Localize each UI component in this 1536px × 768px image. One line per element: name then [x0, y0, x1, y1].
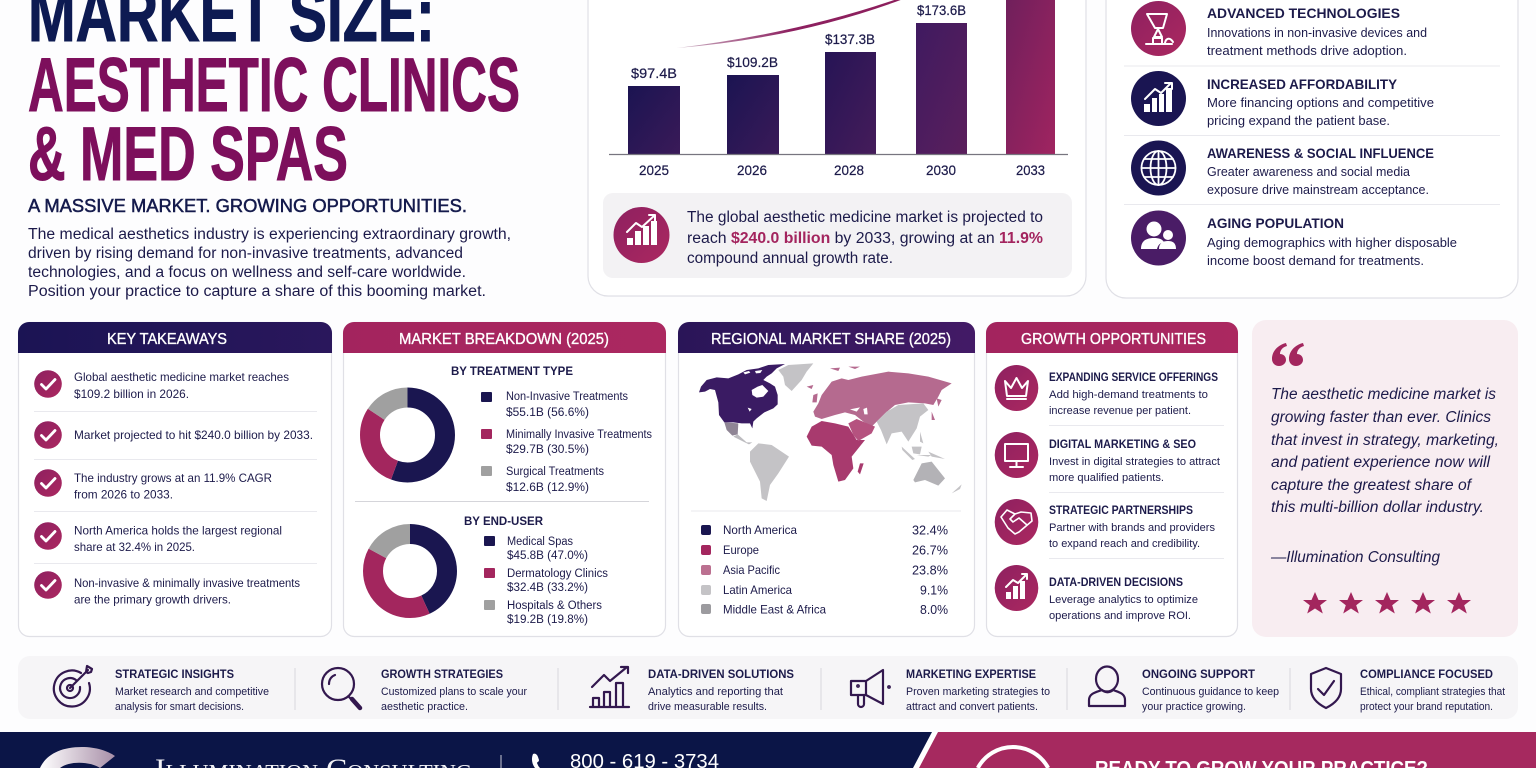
footer: [0, 732, 1536, 768]
opportunity: data-driven decisions: Leverage analytics to optimize: [1049, 594, 1198, 606]
opportunity: expanding service offerings: [995, 365, 1218, 417]
legend: end-user: $32.4B (33.2%): [507, 582, 588, 594]
opportunity: digital marketing and seo: more qualified patients.: [1049, 472, 1164, 484]
driver: aging population: AGING POPULATION: [1207, 215, 1344, 231]
takeaway 2: [34, 421, 313, 449]
service: compliance focused: COMPLIANCE FOCUSED: [1360, 669, 1493, 681]
intro paragraph: [28, 226, 511, 300]
opportunity: strategic partnerships: [995, 499, 1215, 550]
donut chart: end-user: [373, 534, 447, 608]
heading: market breakdown: MARKET BREAKDOWN (2025): [399, 331, 609, 348]
opportunity: digital marketing and seo: Invest in digital strategies to attract: [1049, 456, 1221, 468]
icon: phone: [532, 754, 540, 768]
panel: growth drivers: [1106, 0, 1518, 298]
bar chart: 2033: [1016, 163, 1045, 178]
service: strategic insights: analysis for smart decisions.: [115, 701, 244, 713]
heading: regional market share: [678, 322, 975, 353]
opportunity: strategic partnerships: Partner with brands and providers: [1049, 522, 1215, 534]
intro paragraph: Position your practice to capture a share of this booming market.: [28, 283, 486, 300]
service: marketing expertise: [851, 669, 1050, 713]
world map: [699, 363, 962, 501]
heading: growth opportunities: [986, 322, 1238, 353]
services bar: [18, 656, 1518, 719]
legend: treatment type: $12.6B (12.9%): [506, 482, 589, 494]
driver: advanced technologies: Innovations in non-invasive devices and: [1207, 25, 1427, 40]
takeaway 3: from 2026 to 2033.: [74, 488, 173, 502]
takeaway 1: $109.2 billion in 2026.: [74, 387, 189, 401]
legend: treatment type: Non-Invasive Treatments: [506, 391, 628, 403]
service: marketing expertise: attract and convert patients.: [906, 701, 1038, 713]
map legend: Asia Pacific: [723, 563, 780, 577]
opportunity: data-driven decisions: [995, 565, 1198, 622]
driver: aging population: [1131, 210, 1457, 268]
legend: treatment type: [481, 391, 652, 494]
quote text: —Illumination Consulting: [1270, 549, 1440, 566]
map legend: [701, 522, 948, 617]
driver: awareness and social influence: AWARENESS & SOCIAL INFLUENCE: [1207, 145, 1434, 161]
driver: aging population: Aging demographics with higher disposable: [1207, 235, 1457, 250]
map legend: 26.7%: [912, 542, 948, 558]
service: data-driven solutions: DATA-DRIVEN SOLUTIONS: [648, 669, 794, 681]
opportunity: data-driven decisions: operations and improve ROI.: [1049, 610, 1191, 622]
legend: end-user: $19.2B (19.8%): [507, 614, 588, 626]
opportunity: strategic partnerships: to expand reach and credibility.: [1049, 538, 1200, 550]
panel: regional market share: [678, 322, 975, 636]
takeaway 3: [34, 469, 272, 502]
heading: growth opportunities: GROWTH OPPORTUNITIES: [1021, 331, 1206, 348]
map legend: 23.8%: [912, 562, 948, 578]
panel: testimonial quote: [1252, 320, 1518, 637]
service: ongoing support: your practice growing.: [1142, 701, 1246, 713]
driver: increased affordability: INCREASED AFFORDABILITY: [1207, 76, 1398, 92]
bar chart: $97.4B: [631, 66, 677, 81]
service: data-driven solutions: Analytics and reporting that: [648, 686, 783, 698]
takeaway 4: share at 32.4% in 2025.: [74, 540, 195, 554]
icon: quotation mark: [1272, 343, 1304, 366]
quote text: [1270, 386, 1499, 566]
legend: treatment type: $55.1B (56.6%): [506, 407, 589, 419]
legend: treatment type: Minimally Invasive Treatments: [506, 429, 652, 441]
opportunity: data-driven decisions: DATA-DRIVEN DECISIONS: [1049, 577, 1183, 589]
map legend: Europe: [723, 543, 759, 557]
takeaway 1: Global aesthetic medicine market reaches: [74, 370, 289, 384]
title: AESTHETIC CLINICS: [28, 43, 520, 128]
panel: key takeaways: [18, 322, 332, 636]
quote text: that invest in strategy, marketing,: [1271, 432, 1499, 449]
donut chart: treatment type: [370, 398, 445, 472]
cta badge: [978, 747, 1048, 768]
service: strategic insights: Market research and competitive: [115, 686, 269, 698]
map legend: 8.0%: [920, 602, 948, 617]
takeaway 5: are the primary growth drivers.: [74, 592, 231, 606]
service: growth strategies: Customized plans to scale your: [381, 686, 527, 698]
callout: reach $240.0 billion by 2033, growing at an 11.9%: [687, 230, 1043, 247]
callout: compound annual growth rate.: [687, 250, 893, 267]
legend: treatment type: $29.7B (30.5%): [506, 444, 589, 456]
driver: aging population: income boost demand for treatments.: [1207, 253, 1424, 268]
takeaway 4: [34, 522, 282, 554]
map legend: North America: [723, 523, 797, 537]
quote text: capture the greatest share of: [1271, 477, 1473, 494]
subheading: by treatment type: BY TREATMENT TYPE: [451, 364, 573, 378]
driver: advanced technologies: [1131, 1, 1427, 58]
map legend: 9.1%: [920, 582, 948, 598]
bar chart: 2026: [737, 163, 767, 178]
map legend: Middle East & Africa: [723, 602, 826, 616]
heading: key takeaways: KEY TAKEAWAYS: [107, 331, 227, 348]
map legend: Latin America: [723, 583, 792, 597]
service: ongoing support: [1089, 666, 1279, 713]
driver: increased affordability: [1131, 71, 1434, 128]
opportunity: strategic partnerships: STRATEGIC PARTNERSHIPS: [1049, 505, 1193, 517]
service: compliance focused: Ethical, compliant strategies that: [1360, 686, 1505, 698]
service: growth strategies: [322, 668, 527, 713]
map legend: 32.4%: [912, 522, 948, 538]
panel: market breakdown: [343, 322, 666, 636]
subtitle: A MASSIVE MARKET. GROWING OPPORTUNITIES.: [28, 196, 467, 216]
service: data-driven solutions: [590, 667, 794, 713]
heading: key takeaways: [18, 322, 332, 353]
star rating: [1303, 592, 1471, 614]
driver: increased affordability: pricing expand the patient base.: [1207, 113, 1390, 128]
driver: increased affordability: More financing options and competitive: [1207, 95, 1434, 110]
takeaway 1: [34, 370, 289, 401]
takeaway 4: North America holds the largest regional: [74, 524, 282, 538]
driver: advanced technologies: ADVANCED TECHNOLOGIES: [1207, 5, 1400, 21]
legend: end-user: [484, 536, 608, 626]
service: ongoing support: ONGOING SUPPORT: [1142, 669, 1255, 681]
legend: end-user: $45.8B (47.0%): [507, 550, 588, 562]
service: marketing expertise: Proven marketing strategies to: [906, 686, 1050, 698]
bar chart: 2025: [639, 163, 669, 178]
bar chart: $109.2B: [727, 55, 778, 70]
bar chart: 2028: [834, 163, 864, 178]
title: & MED SPAS: [28, 112, 348, 197]
callout: The global aesthetic medicine market is projected to: [687, 209, 1043, 226]
quote text: and patient experience now will: [1271, 454, 1491, 471]
heading: market breakdown: [343, 322, 666, 353]
service: growth strategies: GROWTH STRATEGIES: [381, 669, 503, 681]
service: compliance focused: protect your brand reputation.: [1360, 701, 1493, 713]
takeaway 3: The industry grows at an 11.9% CAGR: [74, 471, 272, 485]
driver: advanced technologies: treatment methods drive adoption.: [1207, 43, 1407, 58]
intro paragraph: technologies, and a focus on wellness and self-care worldwide.: [28, 264, 466, 281]
bar chart: [609, 0, 1068, 178]
driver: awareness and social influence: Greater awareness and social media: [1207, 164, 1411, 179]
legend: end-user: Hospitals & Others: [507, 600, 602, 612]
intro paragraph: The medical aesthetics industry is experiencing extraordinary growth,: [28, 226, 511, 243]
service: ongoing support: Continuous guidance to keep: [1142, 686, 1279, 698]
intro paragraph: driven by rising demand for non-invasive treatments, advanced: [28, 245, 463, 262]
takeaway 5: Non-invasive & minimally invasive treatments: [74, 576, 300, 590]
opportunity: expanding service offerings: increase revenue per patient.: [1049, 405, 1191, 417]
service: strategic insights: [54, 666, 269, 713]
panel: growth opportunities: [986, 322, 1238, 636]
logo: [40, 747, 115, 768]
service: growth strategies: aesthetic practice.: [381, 701, 468, 713]
driver: awareness and social influence: [1131, 140, 1434, 197]
quote text: The aesthetic medicine market is: [1271, 386, 1496, 403]
opportunity: expanding service offerings: Add high-demand treatments to: [1049, 389, 1208, 401]
service: data-driven solutions: drive measurable results.: [648, 701, 767, 713]
legend: treatment type: Surgical Treatments: [506, 466, 604, 478]
subheading: by end-user: BY END-USER: [464, 514, 543, 528]
bar chart: $173.6B: [917, 3, 966, 18]
quote text: growing faster than ever. Clinics: [1271, 409, 1491, 426]
service: strategic insights: STRATEGIC INSIGHTS: [115, 669, 234, 681]
takeaway 5: [34, 571, 300, 606]
driver: awareness and social influence: exposure drive mainstream acceptance.: [1207, 182, 1429, 197]
service: marketing expertise: MARKETING EXPERTISE: [906, 669, 1036, 681]
title: [28, 0, 520, 197]
opportunity: digital marketing and seo: DIGITAL MARKETING & SEO: [1049, 439, 1196, 451]
panel: market growth chart: [588, 0, 1086, 296]
legend: end-user: Medical Spas: [507, 536, 573, 548]
opportunity: expanding service offerings: EXPANDING SERVICE OFFERINGS: [1049, 372, 1218, 384]
quote text: this multi-billion dollar industry.: [1271, 499, 1484, 516]
opportunity: digital marketing and seo: [995, 432, 1221, 484]
takeaway 2: Market projected to hit $240.0 billion by 2033.: [74, 428, 313, 442]
legend: end-user: Dermatology Clinics: [507, 568, 608, 580]
bar chart: 2030: [926, 163, 956, 178]
bar chart: $137.3B: [825, 32, 875, 47]
heading: regional market share: REGIONAL MARKET SHARE (2025): [711, 331, 951, 348]
service: compliance focused: [1311, 668, 1505, 713]
callout: [603, 193, 1072, 278]
